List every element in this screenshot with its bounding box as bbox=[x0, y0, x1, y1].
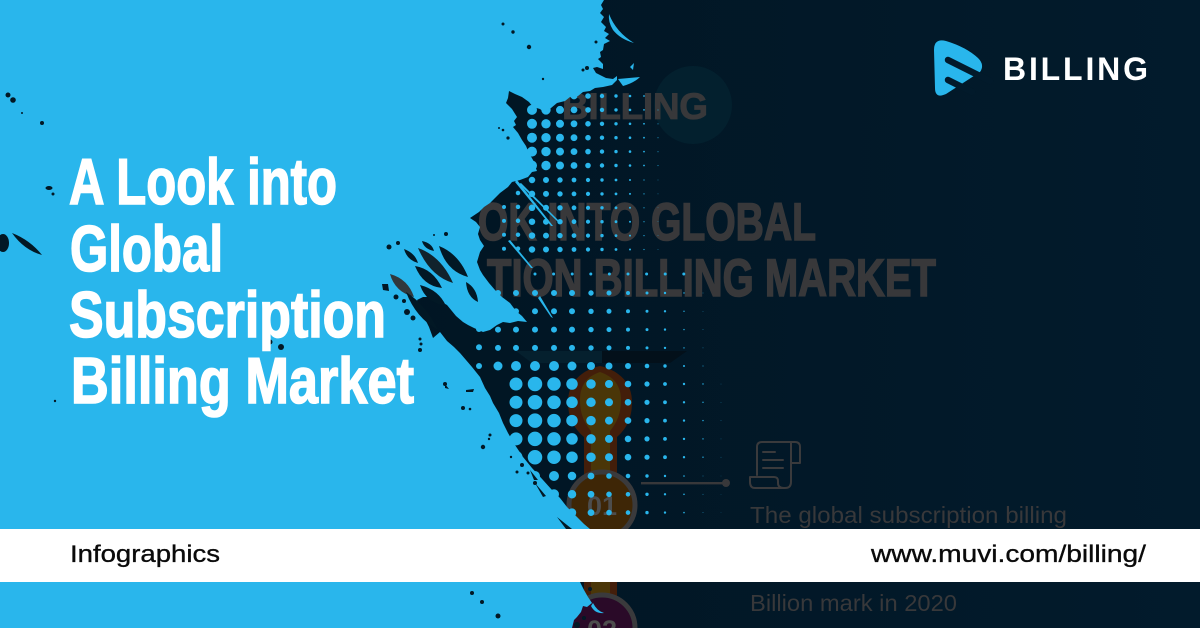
icon: billing play mark bbox=[934, 40, 990, 96]
title line four: Billing Market bbox=[71, 344, 414, 417]
faded thermometer timeline bbox=[568, 366, 635, 628]
footer label: Infographics bbox=[70, 541, 220, 568]
logo bbox=[934, 40, 1148, 96]
title: A Look into bbox=[69, 145, 337, 218]
faded thermometer timeline: 01 bbox=[587, 491, 617, 521]
scratch marks on blue bbox=[12, 233, 572, 529]
lower dot grid bbox=[479, 293, 721, 513]
faded ribbon bbox=[516, 351, 687, 363]
footer url: www.muvi.com/billing/ bbox=[870, 541, 1146, 568]
logo word: BILLING bbox=[1003, 51, 1148, 87]
faded body text bbox=[750, 502, 1067, 616]
faded underlying infographic bbox=[478, 66, 1067, 628]
faded connector line bbox=[641, 479, 730, 487]
dark background panel bbox=[380, 0, 1200, 628]
faded body text last line: Billion mark in 2020 bbox=[750, 590, 957, 616]
upper dot grid bbox=[504, 96, 658, 250]
faded body text: The global subscription billing bbox=[750, 502, 1067, 528]
scattered specks bbox=[0, 10, 606, 628]
dark paint specks and streaks bbox=[0, 10, 606, 628]
faded heading line one: OK INTO GLOBAL bbox=[478, 193, 816, 252]
faded icon: scroll bbox=[750, 442, 800, 488]
halftone dots bbox=[479, 96, 721, 513]
title line three: Subscription bbox=[69, 278, 386, 351]
title bbox=[69, 145, 414, 417]
blue streaks over dark area bbox=[508, 14, 640, 613]
faded heading line two: TION BILLING MARKET bbox=[487, 249, 936, 308]
transition row bbox=[535, 272, 700, 276]
title line two: Global bbox=[70, 212, 223, 285]
white footer bar bbox=[0, 529, 1200, 582]
blue paint splash panel bbox=[0, 0, 617, 628]
faded logo word: BILLING bbox=[562, 86, 708, 127]
